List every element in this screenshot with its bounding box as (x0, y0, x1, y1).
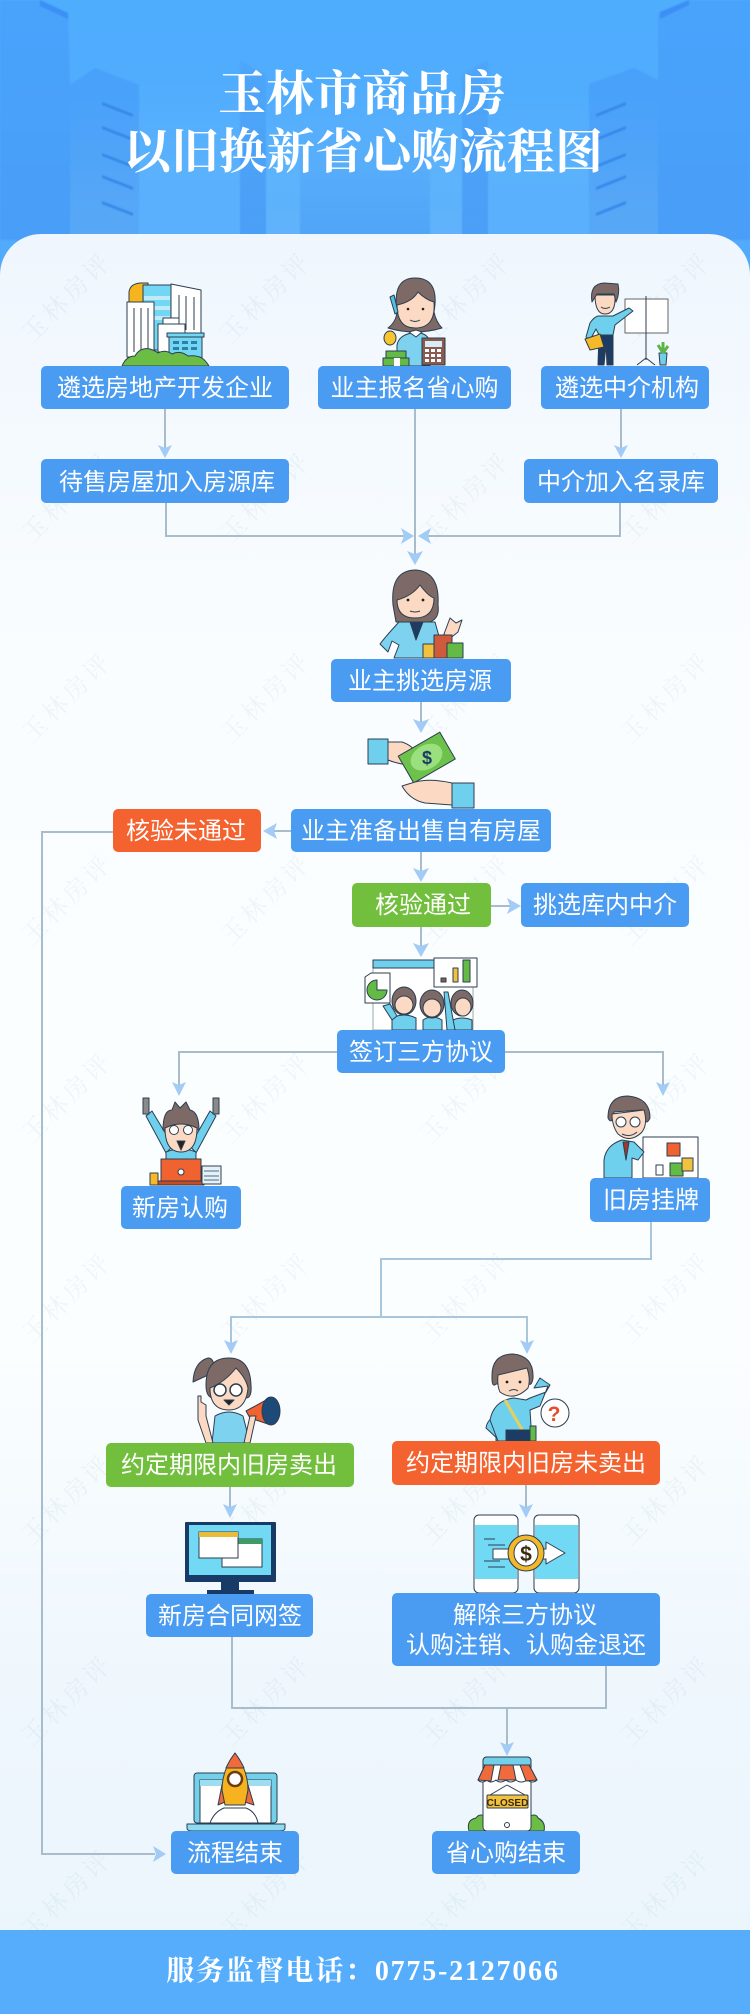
icon: hands passing money: $ (422, 748, 432, 768)
box: verification failed: 核验未通过 (126, 818, 246, 845)
arrow: unsold to termination (519, 1485, 533, 1518)
box: select developers: 遴选房地产开发企业 (57, 375, 273, 402)
arrow: sold to online contract (223, 1487, 237, 1518)
icon: phones with coin transfer: $ (520, 1543, 532, 1566)
text: 玉林房评 (16, 646, 118, 748)
icon: phones with coin transfer (474, 1515, 579, 1593)
box: new house online signing: 新房合同网签 (158, 1603, 302, 1630)
box: add to housing pool (41, 459, 289, 503)
header background (0, 0, 750, 300)
arrow: contract and termination join to end (232, 1637, 606, 1756)
box: old house sold (106, 1443, 354, 1487)
box: select agencies (541, 366, 709, 409)
box: old house unsold (392, 1441, 660, 1485)
text: 玉林房评 (615, 848, 717, 950)
box: sign tripartite agreement: 签订三方协议 (349, 1039, 493, 1066)
box: old house sold: 约定期限内旧房卖出 (121, 1452, 337, 1479)
box: owner selects housing: 业主挑选房源 (348, 668, 492, 695)
box: verification failed (113, 809, 261, 852)
box: owner selects housing (331, 659, 511, 702)
icon: computer monitor (185, 1522, 276, 1594)
box: old house listing: 旧房挂牌 (603, 1187, 699, 1214)
icon: laptop with rocket (187, 1753, 285, 1831)
box: add to agent roster: 中介加入名录库 (537, 469, 705, 496)
box: old house listing (590, 1178, 710, 1222)
icon: closed store on phone: CLOSED (487, 1798, 528, 1809)
text: 玉林房评 (415, 1246, 517, 1348)
box: verification passed: 核验通过 (375, 892, 471, 919)
text: 玉林房评 (215, 646, 317, 748)
icon: worried man with question: ? (548, 1403, 560, 1426)
text: 玉林房评 (615, 646, 717, 748)
box: process end (171, 1831, 299, 1874)
box: old house unsold: 约定期限内旧房未卖出 (406, 1450, 646, 1477)
icon: closed store on phone (468, 1757, 544, 1831)
text: 玉林房评 (415, 446, 517, 548)
box: choose agency in pool: 挑选库内中介 (533, 892, 677, 919)
icon: hands passing money (368, 732, 474, 808)
text: 玉林房评 (16, 446, 118, 548)
text: 玉林房评 (615, 1046, 717, 1148)
text: 玉林房评 (215, 1649, 317, 1751)
arrow: agreement to old house listing (505, 1052, 670, 1096)
arrow: owner signup down to selection (407, 409, 423, 565)
footer bar (0, 1930, 750, 2014)
text: 玉林房评 (16, 1843, 118, 1945)
text: 玉林房评 (415, 1843, 517, 1945)
box: choose agency in pool (521, 883, 689, 927)
box: select developers (41, 366, 289, 409)
text: 玉林房评 (415, 848, 517, 950)
arrow: left branch joins centre (166, 502, 414, 544)
text: 玉林房评 (16, 246, 118, 348)
text: 玉林房评 (215, 1046, 317, 1148)
box: verification passed (352, 883, 491, 927)
box: new house subscription (121, 1186, 241, 1229)
title (123, 68, 603, 179)
arrow: prepare to verification passed (413, 852, 429, 882)
text: 玉林房评 (215, 1246, 317, 1348)
icon: man with notice board (604, 1096, 698, 1178)
box: owner prepares to sell: 业主准备出售自有房屋 (301, 818, 541, 845)
arrow: right branch joins centre (418, 502, 620, 544)
icon: woman with megaphone (193, 1358, 280, 1443)
text: 玉林房评 (615, 446, 717, 548)
arrow: listing branches to outcomes (224, 1222, 651, 1354)
text: 玉林房评 (215, 246, 317, 348)
icon: office buildings (122, 283, 209, 366)
arrow: passed to agreement (413, 927, 429, 957)
text: 玉林房评 (615, 1649, 717, 1751)
box: new house online signing (146, 1594, 313, 1637)
box: cancel agreement: 认购注销、认购金退还 (406, 1632, 646, 1659)
box: process end: 流程结束 (187, 1840, 283, 1867)
text: 玉林房评 (415, 1649, 517, 1751)
title: 以旧换新省心购流程图 (123, 126, 603, 179)
text: 玉林房评 (415, 1046, 517, 1148)
text: 玉林房评 (16, 848, 118, 950)
text: 玉林房评 (615, 1448, 717, 1550)
box: add to agent roster (524, 459, 718, 503)
text: 玉林房评 (215, 446, 317, 548)
icon: man with whiteboard (585, 283, 668, 365)
text: 玉林房评 (615, 1246, 717, 1348)
text: 玉林房评 (215, 1843, 317, 1945)
box: select agencies: 遴选中介机构 (555, 375, 699, 402)
arrow: agreement to new house (172, 1052, 337, 1096)
box: owner signs up (318, 366, 511, 409)
arrow: prepare to verification failed (263, 823, 291, 839)
text: 玉林房评 (615, 1843, 717, 1945)
text: 玉林房评 (415, 246, 517, 348)
text: 玉林房评 (16, 1046, 118, 1148)
box: sign tripartite agreement (337, 1030, 505, 1073)
box: owner prepares to sell (291, 809, 551, 852)
icon: woman with small buildings (380, 570, 463, 658)
arrow: agency to roster (614, 409, 628, 458)
box: new house subscription: 新房认购 (132, 1195, 228, 1222)
box: owner signs up: 业主报名省心购 (330, 375, 498, 402)
text: 玉林房评 (16, 1246, 118, 1348)
icon: woman with calculator (383, 278, 445, 366)
footer bar: 服务监督电话：0775-2127066 (166, 1955, 560, 1987)
text: 玉林房评 (415, 1448, 517, 1550)
icon: excited man with laptop (143, 1098, 221, 1185)
arrow: selection to money (413, 702, 429, 733)
box: add to housing pool: 待售房屋加入房源库 (59, 469, 275, 496)
arrow: passed to choose agency (491, 898, 521, 914)
text: 玉林房评 (615, 246, 717, 348)
icon: worried man with question (486, 1354, 569, 1441)
text: 玉林房评 (16, 1649, 118, 1751)
arrow: developer to housing pool (158, 409, 172, 458)
text: 玉林房评 (215, 1448, 317, 1550)
box: cancel agreement: 解除三方协议 (453, 1602, 597, 1629)
arrow: failed to process end (42, 832, 166, 1862)
box: worry-free purchase end (432, 1831, 580, 1874)
title: 玉林市商品房 (218, 68, 506, 121)
text: 玉林房评 (16, 1448, 118, 1550)
text: 玉林房评 (215, 848, 317, 950)
icon: team with charts (365, 958, 477, 1030)
text: 玉林房评 (415, 646, 517, 748)
box: worry-free purchase end: 省心购结束 (446, 1840, 566, 1867)
box: cancel agreement (392, 1593, 660, 1666)
